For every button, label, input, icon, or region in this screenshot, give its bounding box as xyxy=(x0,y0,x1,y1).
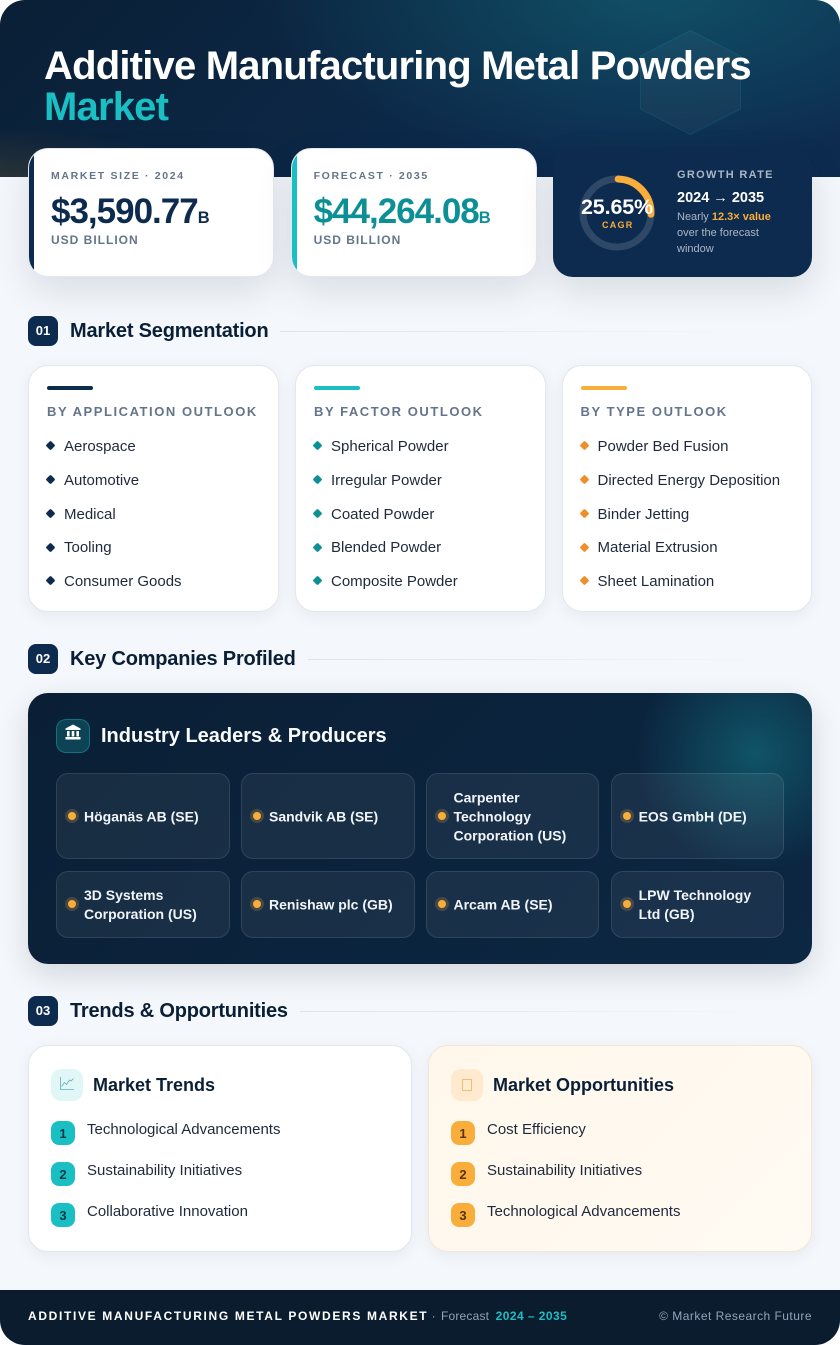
company cards: Höganäs AB (SE) xyxy=(84,808,199,824)
panel: industry leaders: EOS GmbH (DE) xyxy=(639,808,747,824)
section heading: key companies xyxy=(28,644,606,674)
panel: by type outlook: Powder Bed Fusion xyxy=(598,438,728,455)
icon: missing glyph box xyxy=(451,1069,483,1101)
section heading: market segmentation: 01 xyxy=(36,323,50,338)
panel: industry leaders: Carpenter Technology Corporation (US) xyxy=(454,789,566,843)
panel: market trends: 2 xyxy=(59,1167,67,1182)
panel: by type outlook: BY TYPE OUTLOOK xyxy=(580,404,728,419)
stat card: growth rate xyxy=(553,148,812,277)
panel: by type outlook: Binder Jetting xyxy=(598,506,689,523)
CAGR ring xyxy=(580,176,654,250)
panel: market opportunities xyxy=(428,1045,812,1252)
panel: industry leaders: 3D Systems Corporation (US) xyxy=(84,887,197,922)
panel: market trends: Market Trends xyxy=(93,1075,215,1095)
stat card: forecast: USD BILLION xyxy=(314,233,401,247)
panel: by factor outlook: Composite Powder xyxy=(331,573,458,590)
section heading: trends: Trends & Opportunities xyxy=(70,1000,288,1022)
CAGR value: 25.65% xyxy=(581,195,653,219)
section heading: key companies: 02 xyxy=(36,651,50,666)
icon: chart xyxy=(51,1069,83,1101)
panel: market trends: 1 xyxy=(59,1126,67,1141)
panel: industry leaders: LPW Technology Ltd (GB) xyxy=(639,887,751,922)
stat card: forecast: $44,264.08B xyxy=(314,192,491,231)
panel: by factor outlook: Blended Powder xyxy=(331,539,441,556)
panel: by factor outlook: BY FACTOR OUTLOOK xyxy=(314,404,484,419)
panel: by factor outlook: Coated Powder xyxy=(331,506,434,523)
section heading: market segmentation xyxy=(28,316,578,346)
panel: by application outlook: Medical xyxy=(64,506,116,523)
panel: by factor outlook: Irregular Powder xyxy=(331,472,442,489)
stat card: market size xyxy=(28,148,274,277)
growth text: GROWTH RATE xyxy=(677,169,774,181)
panel: by application outlook: Tooling xyxy=(64,539,112,556)
stat card: forecast: FORECAST · 2035 xyxy=(314,170,429,182)
panel: market opportunities: 1 xyxy=(459,1126,467,1141)
panel: by type outlook xyxy=(562,365,812,612)
header banner xyxy=(0,0,840,177)
panel heading: Industry Leaders & Producers xyxy=(101,725,387,747)
section heading: trends: 03 xyxy=(36,1003,50,1018)
panel: market opportunities: Sustainability Initiatives xyxy=(487,1162,642,1179)
panel: market opportunities: Technological Advancements xyxy=(487,1203,680,1220)
panel: industry leaders: Sandvik AB (SE) xyxy=(269,808,378,824)
section heading: key companies: Key Companies Profiled xyxy=(70,648,296,670)
panel: by type outlook: Directed Energy Deposition xyxy=(598,472,780,489)
decorative hexagon xyxy=(640,30,741,135)
panel: industry leaders xyxy=(28,693,812,964)
footer credit: © Market Research Future xyxy=(659,1309,812,1323)
panel: by application outlook: BY APPLICATION OUTLOOK xyxy=(47,404,258,419)
panel: by type outlook: Sheet Lamination xyxy=(598,573,714,590)
panel: market trends xyxy=(28,1045,412,1252)
panel: market trends: Collaborative Innovation xyxy=(87,1203,248,1220)
stat card: market size: USD BILLION xyxy=(51,233,139,247)
panel: industry leaders: Renishaw plc (GB) xyxy=(269,896,393,912)
title xyxy=(44,44,751,129)
panel: market trends: 3 xyxy=(59,1208,67,1223)
icon: bank xyxy=(56,719,90,753)
section heading: trends xyxy=(28,996,598,1026)
panel: market trends: Technological Advancements xyxy=(87,1121,280,1138)
footer title: ADDITIVE MANUFACTURING METAL POWDERS MARKET · Forecast 2024 – 2035 xyxy=(28,1309,567,1323)
title: Additive Manufacturing Metal Powders xyxy=(44,44,751,88)
panel: by factor outlook: Spherical Powder xyxy=(331,438,449,455)
stat card: growth rate: CAGR xyxy=(602,220,634,230)
company cards xyxy=(56,773,230,859)
stat card: growth rate: window xyxy=(677,243,714,255)
panel: market opportunities: Cost Efficiency xyxy=(487,1121,586,1138)
stat card: growth rate: Nearly 12.3× value xyxy=(677,211,771,223)
panel: industry leaders: Arcam AB (SE) xyxy=(454,896,553,912)
panel: by application outlook: Automotive xyxy=(64,472,139,489)
stat card: market size: $3,590.77B xyxy=(51,192,210,231)
panel: by type outlook: Material Extrusion xyxy=(598,539,718,556)
panel: by factor outlook xyxy=(295,365,546,612)
panel: by application outlook: Consumer Goods xyxy=(64,573,182,590)
panel: market opportunities: Market Opportunities xyxy=(493,1075,674,1095)
panel: by application outlook xyxy=(28,365,279,612)
stat card: market size: MARKET SIZE · 2024 xyxy=(51,170,185,182)
title: Market xyxy=(44,85,168,129)
stat card: forecast xyxy=(291,148,537,277)
panel: market trends: Sustainability Initiatives xyxy=(87,1162,242,1179)
panel: market opportunities: 2 xyxy=(459,1167,467,1182)
stat card: growth rate: 2024 → 2035 xyxy=(677,190,764,206)
section heading: market segmentation: Market Segmentation xyxy=(70,320,268,342)
panel: market opportunities: 3 xyxy=(459,1208,467,1223)
footer xyxy=(0,1290,840,1345)
stat card: growth rate: over the forecast xyxy=(677,227,759,239)
panel: by application outlook: Aerospace xyxy=(64,438,136,455)
